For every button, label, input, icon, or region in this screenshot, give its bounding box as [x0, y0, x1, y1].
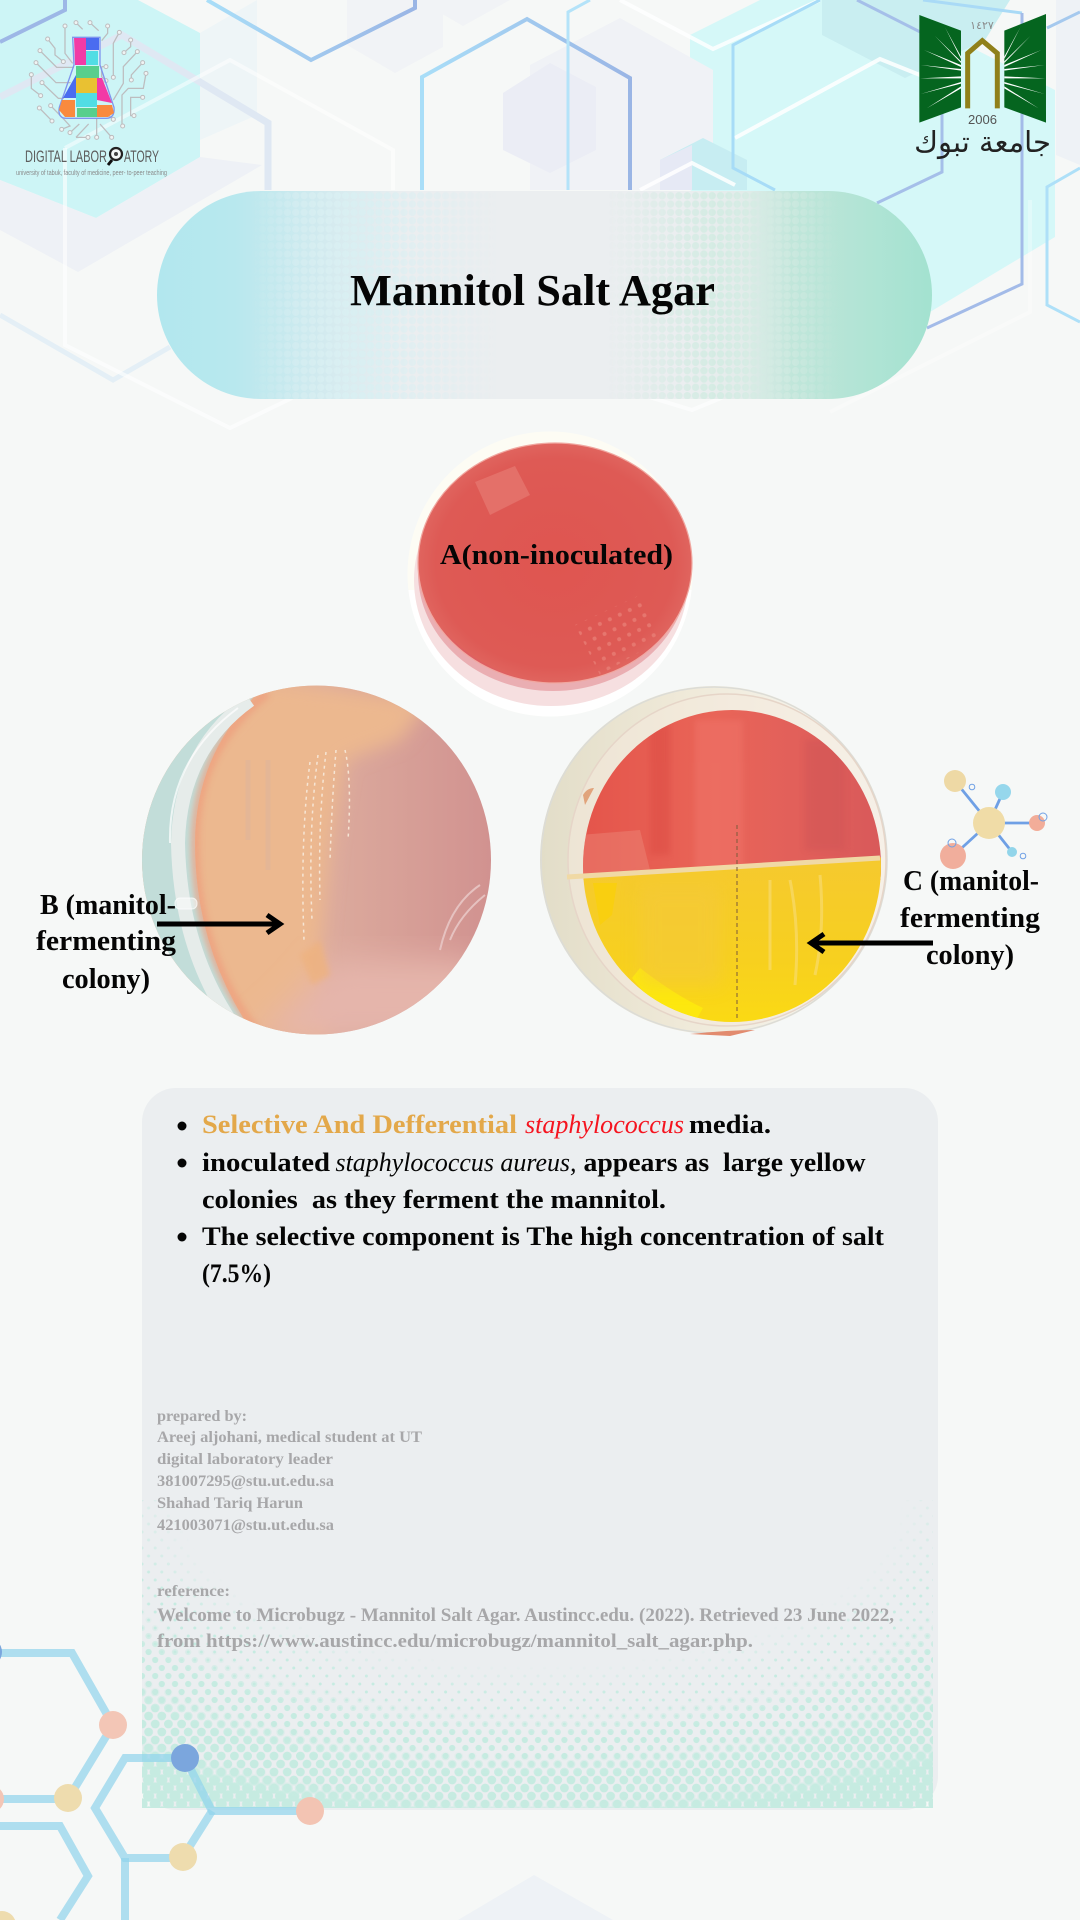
icon: circuit flask [29, 21, 148, 139]
logo tagline: university of tabuk, faculty of medicine, peer- to-peer teaching [16, 168, 167, 177]
founding year: 2006 [968, 112, 997, 127]
bullet list: The selective component is The high concentration of salt [202, 1222, 884, 1251]
bullet list: (7.5%) [202, 1259, 271, 1288]
prepared by credits: Areej aljohani, medical student at UT [157, 1429, 423, 1446]
petri dish B: manitol-fermenting colony [36, 680, 494, 1040]
hexagon network decoration [0, 1638, 324, 1920]
hijri year: ١٤٢٧ [970, 19, 994, 32]
reference: Welcome to Microbugz - Mannitol Salt Agar. Austincc.edu. (2022). Retrieved 23 June 2022, [157, 1606, 894, 1626]
icon: open book emblem [919, 14, 1046, 123]
label C: colony) [926, 940, 1014, 971]
petri dish A: non-inoculated [408, 432, 692, 717]
label A: A(non-inoculated) [440, 540, 673, 571]
logo: digital laboratory [16, 21, 167, 177]
panel: description [142, 1088, 938, 1810]
label B [36, 890, 176, 995]
icon: molecule [940, 770, 1047, 869]
halftone mint fade [142, 1500, 933, 1808]
bullet list: colonies as they ferment the mannitol. [202, 1185, 666, 1214]
logo: university of tabuk [914, 14, 1051, 159]
arabic university name: جامعة تبوك [914, 125, 1051, 159]
label B: colony) [62, 964, 150, 995]
bullet list: inoculated [202, 1148, 331, 1177]
petri dish C: manitol-fermenting colony [540, 686, 1040, 1036]
label C [900, 866, 1040, 971]
title banner [157, 191, 933, 399]
reference [157, 1583, 894, 1652]
title text: Mannitol Salt Agar [350, 266, 715, 315]
bullet list: Selective And Defferential [202, 1110, 517, 1139]
bullet list [178, 1110, 884, 1288]
reference: from https://www.austincc.edu/microbugz/mannitol_salt_agar.php. [157, 1632, 753, 1652]
bullet list: media. [689, 1110, 771, 1139]
prepared by credits: 381007295@stu.ut.edu.sa [157, 1473, 334, 1490]
label C: fermenting [900, 903, 1040, 934]
prepared by credits: 421003071@stu.ut.edu.sa [157, 1517, 334, 1534]
label B: fermenting [36, 926, 176, 957]
arrow C [811, 934, 933, 952]
bullet list: staphylococcus [525, 1110, 684, 1139]
label C: C (manitol- [903, 866, 1039, 897]
reference: reference: [157, 1583, 230, 1600]
prepared by credits: digital laboratory leader [157, 1451, 333, 1468]
arrow B [157, 915, 280, 933]
logo wordmark: DIGITAL LABOR [25, 147, 107, 166]
label B: B (manitol- [40, 890, 176, 921]
bullet list: appears as large yellow [584, 1148, 866, 1177]
logo wordmark end: ATORY [124, 147, 159, 166]
bullet list: staphylococcus aureus, [336, 1148, 576, 1177]
prepared by credits [157, 1408, 423, 1534]
icon: magnifier [108, 148, 122, 165]
prepared by credits: prepared by: [157, 1408, 247, 1425]
prepared by credits: Shahad Tariq Harun [157, 1495, 303, 1512]
